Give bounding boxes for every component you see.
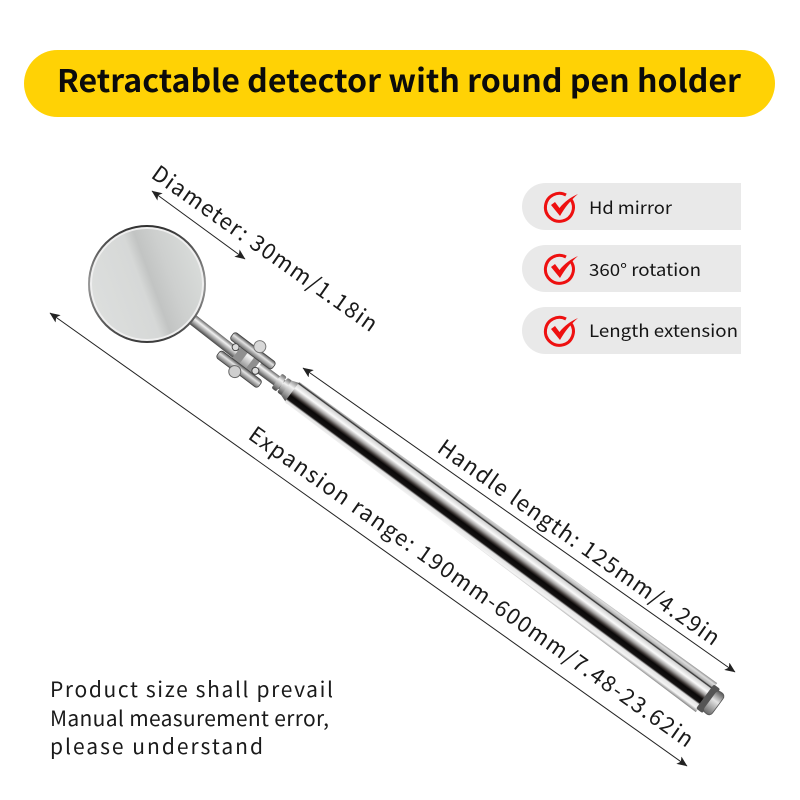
disclaimer note: please understand [50, 731, 263, 761]
icon: red check [545, 317, 578, 345]
disclaimer note: Manual measurement error, [50, 703, 329, 733]
label: handle length: Handle length: 125mm/4.29in [432, 431, 727, 652]
icon: red check [545, 193, 578, 221]
icon: red check [545, 255, 578, 283]
feature tag: Hd mirror: Hd mirror [589, 194, 672, 219]
feature tag: 360 rotation [522, 245, 741, 292]
feature tag: Length extension [522, 307, 741, 354]
title banner [24, 50, 775, 117]
disclaimer note [50, 674, 333, 761]
product: inspection mirror [88, 225, 728, 720]
barrel [281, 378, 717, 712]
arrow: diameter [152, 191, 245, 259]
title banner: Retractable detector with round pen holder [57, 56, 741, 101]
arrow: expansion range [50, 313, 687, 766]
swivel joint [212, 324, 282, 393]
disclaimer note: Product size shall prevail [50, 674, 333, 704]
feature tag: Length extension: Length extension [589, 317, 738, 342]
feature tag: 360 rotation: 360° rotation [589, 256, 701, 281]
label: diameter: Diameter: 30mm/1.18in [146, 157, 385, 338]
arrow: handle length [303, 368, 735, 672]
label: expansion range: Expansion range: 190mm-600mm/7.48-23.62in [243, 418, 701, 754]
end cap [696, 684, 727, 718]
mirror head [88, 225, 206, 343]
mirror stem [189, 315, 240, 358]
telescopic handle [248, 353, 728, 720]
neck [251, 357, 302, 404]
feature tag: Hd mirror [522, 183, 741, 230]
